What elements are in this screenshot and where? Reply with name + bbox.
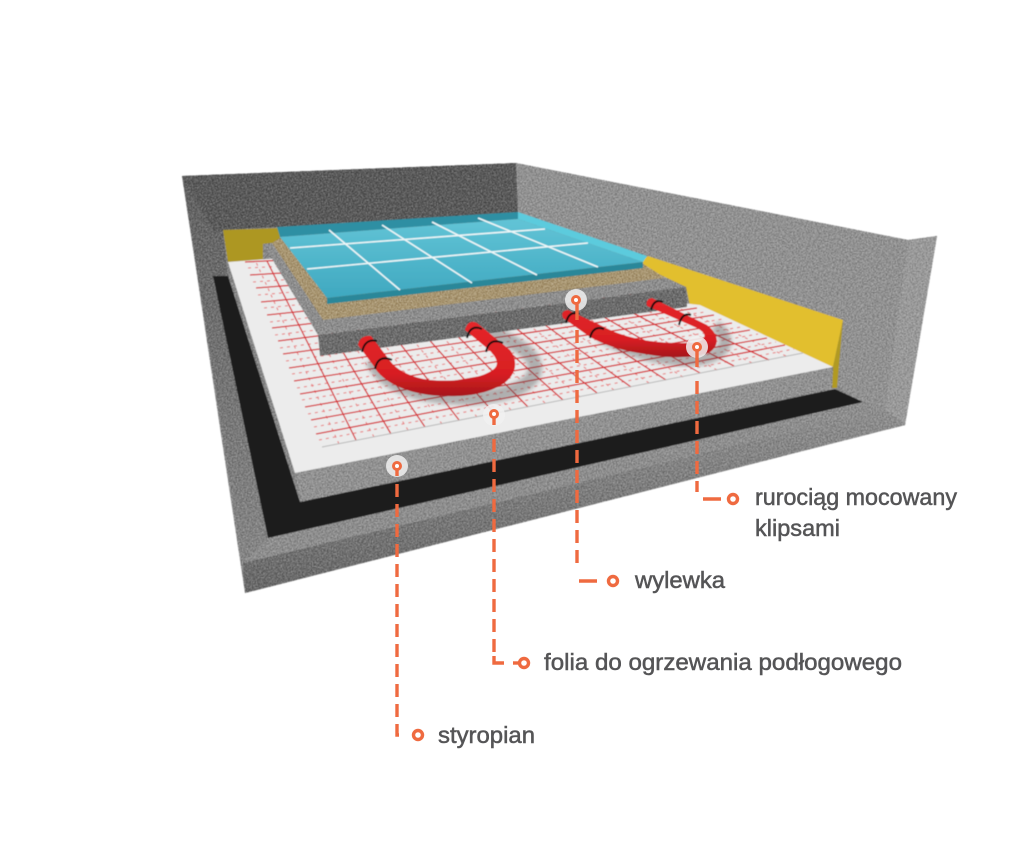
callout: folia	[483, 404, 902, 675]
ceramic tiles	[277, 212, 647, 304]
callout: rurociąg mocowany klipsami	[686, 336, 958, 541]
callout: rurociąg mocowany klipsami: klipsami	[755, 515, 840, 541]
callout: styropian	[386, 455, 535, 748]
callouts	[386, 289, 958, 748]
black damp-proof layer	[213, 276, 863, 538]
concrete screed	[263, 243, 687, 356]
shadow of left pipe	[372, 332, 535, 398]
left heating pipe	[358, 322, 515, 396]
callout: folia: folia do ogrzewania podłogowego	[544, 649, 902, 675]
right heating pipe	[562, 298, 717, 357]
polystyrene board	[228, 258, 833, 502]
callout: rurociąg mocowany klipsami: rurociąg mocowany	[755, 484, 958, 510]
concrete shell	[182, 163, 937, 593]
shadow of right pipe	[600, 326, 725, 360]
callout: styropian: styropian	[438, 722, 535, 748]
yellow edge strip, back left	[223, 228, 280, 262]
cross-section illustration	[182, 163, 937, 593]
callout: wylewka	[565, 289, 725, 593]
pipe clips	[362, 328, 503, 369]
callout: wylewka: wylewka	[634, 567, 725, 593]
adhesive layer	[272, 238, 665, 320]
pipe clips	[566, 301, 691, 338]
yellow edge strip, right	[640, 256, 843, 388]
red grid foil	[245, 247, 803, 447]
tile grout lines	[290, 218, 598, 290]
